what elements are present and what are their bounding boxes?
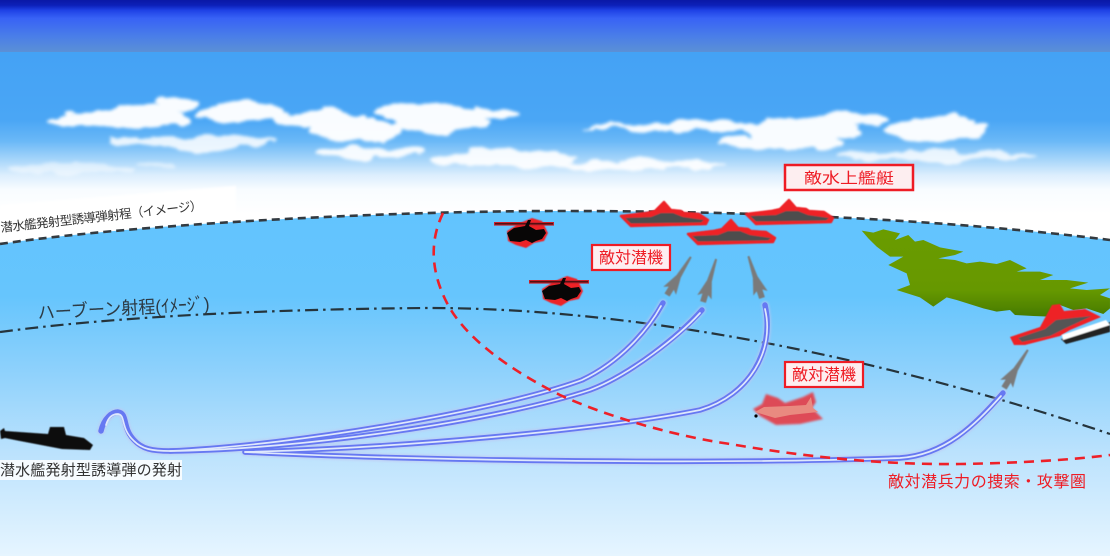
label: submarine missile range: 潜水艦発射型誘導弾射程（イメージ） xyxy=(0,198,203,235)
launch trajectories core xyxy=(106,306,1001,461)
missile 1 xyxy=(661,253,697,299)
missile trajectories xyxy=(101,303,1003,461)
enemy ship 2 xyxy=(746,200,833,224)
sea xyxy=(0,211,1110,556)
enemy patrol aircraft xyxy=(753,392,823,425)
label: enemy surface ships: 敵水上艦艇 xyxy=(804,170,894,187)
missile 4 xyxy=(998,346,1034,392)
enemy ship 1 xyxy=(621,202,708,226)
missile 2 xyxy=(696,257,723,304)
label: Harpoon range: ハーブーン射程(ｲﾒｰｼﾞ) xyxy=(37,293,210,323)
label: anti-submarine aircraft 1 xyxy=(592,245,670,270)
label: enemy surface ships xyxy=(785,165,913,190)
Harpoon range line xyxy=(0,308,1110,434)
submarine missile range line xyxy=(0,211,1110,244)
label: anti-submarine aircraft 2: 敵対潜機 xyxy=(792,366,856,384)
launch trajectories glow xyxy=(101,303,1003,461)
friendly-side ship near island xyxy=(1010,304,1110,345)
submarine xyxy=(0,427,93,450)
enemy helicopter 2 xyxy=(529,276,589,306)
launch trajectories stroke xyxy=(101,303,1003,461)
enemy helicopter 1 xyxy=(494,218,554,248)
enemy ship 3 xyxy=(688,220,775,244)
clouds xyxy=(9,97,1036,174)
missile 3 xyxy=(741,254,769,300)
white strip behind missile range label xyxy=(0,186,236,236)
island xyxy=(862,229,1110,317)
label: anti-submarine aircraft 1: 敵対潜機 xyxy=(599,249,663,267)
red search and attack zone line xyxy=(434,213,1110,464)
label: submarine missile launch: 潜水艦発射型誘導弾の発射 xyxy=(0,462,182,479)
label: search and attack zone: 敵対潜兵力の捜索・攻撃圏 xyxy=(888,473,1086,491)
label: anti-submarine aircraft 2 xyxy=(785,362,863,387)
sky background xyxy=(0,0,1110,214)
